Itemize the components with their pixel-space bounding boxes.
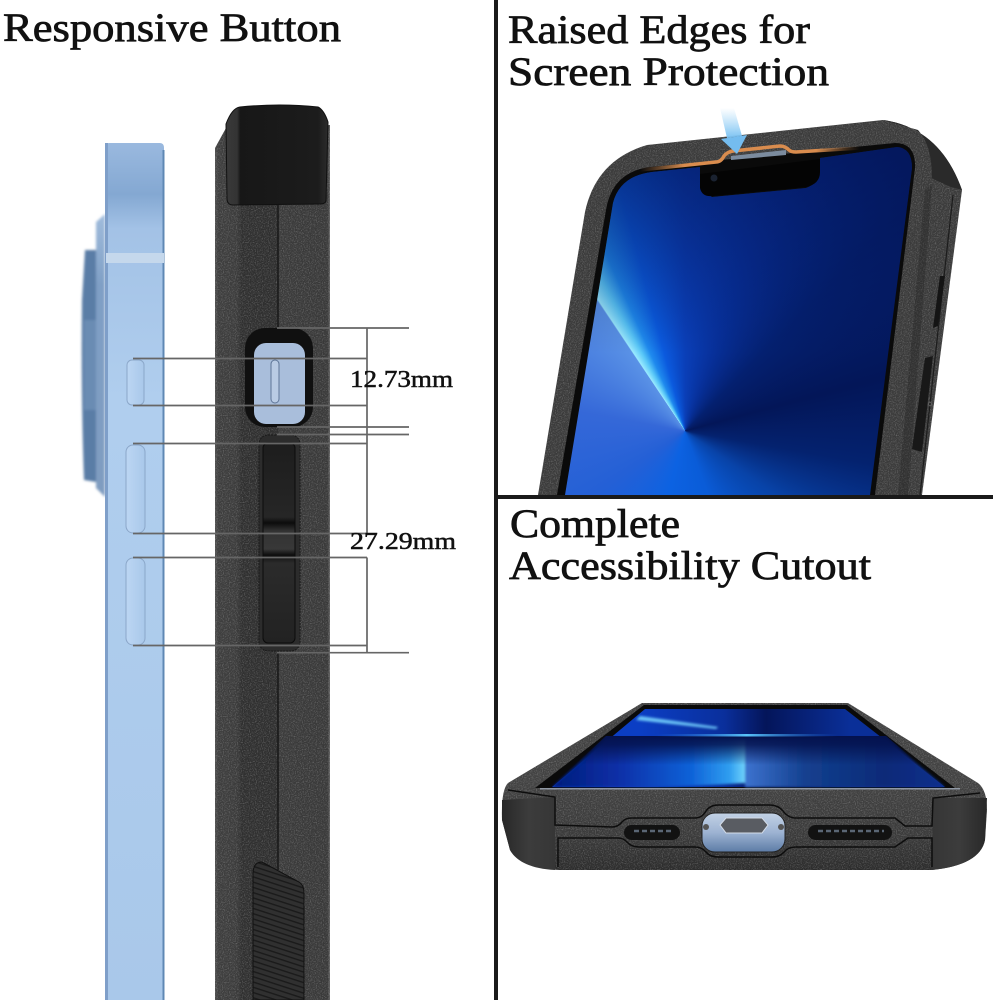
heading: Complete Accessibility Cutout: Complete [510,501,680,546]
case seams [508,790,980,867]
side buttons [933,276,945,328]
screen [552,709,945,787]
orange raised edge [640,146,860,170]
measurement lines [133,328,409,653]
label: 27.29mm: 27.29mm [350,529,456,555]
horizontal divider [497,495,993,499]
phone case bottom view [502,703,987,870]
right speaker [808,825,892,840]
vertical divider [494,0,498,1000]
camera bump [82,214,105,497]
label: 12.73mm: 12.73mm [350,367,453,393]
heading: Responsive Button: Responsive Button [3,5,341,50]
panel: responsive button side views [3,5,456,1000]
grip ribs [253,862,304,1000]
panel: raised edges [508,14,962,495]
charging port [702,813,785,852]
silent switch cutout [245,328,313,427]
seam [277,205,279,870]
notch [700,159,820,196]
black screen bezel [557,143,915,495]
heading: Raised Edges for Screen Protection: Screen Protection [508,49,829,94]
phone case front [538,120,962,495]
volume up [126,445,145,533]
screen [565,147,912,495]
heading: Complete Accessibility Cutout: Accessibility Cutout [509,543,871,588]
heading: Raised Edges for Screen Protection: Raised Edges for [508,7,810,52]
panel: accessibility cutout [502,501,987,870]
heading: Complete Accessibility Cutout [509,501,871,588]
left speaker [624,825,680,840]
phone case side view [215,105,330,1000]
volume button [259,435,300,651]
screen bezel [535,705,955,788]
arrow pointing to raised edge [720,108,747,154]
silent switch [127,360,144,405]
top corner cap [226,105,328,205]
heading: Raised Edges for Screen Protection [508,7,829,94]
phone: bare blue phone side [82,143,164,1000]
volume down [126,558,145,645]
